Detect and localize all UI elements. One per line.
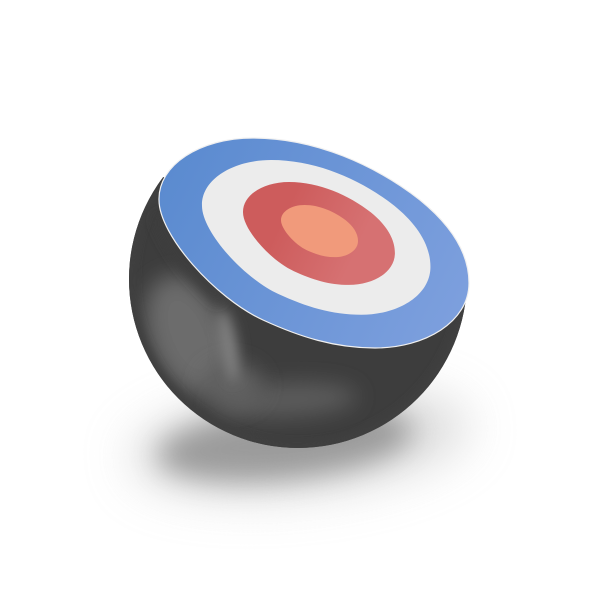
orange bullseye (281, 205, 358, 257)
target face (159, 138, 469, 348)
red ring (243, 182, 395, 285)
illustration: target hemisphere (124, 138, 476, 514)
dark hemisphere body (129, 177, 466, 448)
ground shadow (125, 373, 475, 511)
blue outer ring with light rim (159, 138, 469, 348)
white ring (202, 160, 430, 315)
